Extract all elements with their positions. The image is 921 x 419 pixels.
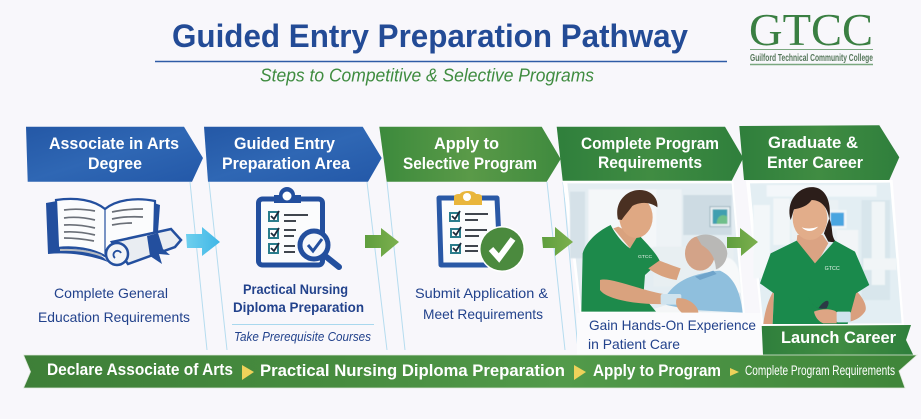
text: complete general education requirements: Education Requirements <box>38 309 190 325</box>
text: take prerequisite courses: Take Prerequisite Courses <box>234 329 371 344</box>
heading: apply to selective program: Apply to <box>434 135 499 153</box>
heading: associate in arts degree <box>26 127 203 182</box>
text: submit application and meet requirements <box>415 285 549 322</box>
heading: associate in arts degree: Degree <box>88 155 142 173</box>
text: practical nursing diploma preparation: Practical Nursing <box>243 282 348 297</box>
panel: apply to selective program <box>379 127 561 322</box>
heading: complete program requirements <box>557 127 743 181</box>
logo: GTCC: GTCC <box>749 5 873 55</box>
arrow: to apply <box>365 228 399 257</box>
ribbon: launch career <box>762 325 913 355</box>
icon: yellow triangle <box>242 365 254 380</box>
text: gain hands-on experience in patient care <box>577 313 763 355</box>
arrow: to guided entry <box>186 227 220 256</box>
arrow: to graduate <box>727 228 758 256</box>
arrow: to complete program <box>542 227 573 256</box>
icon: yellow triangle <box>574 365 586 380</box>
photo: nurse with patient: GTCC <box>638 254 653 260</box>
heading: associate in arts degree: Associate in Arts <box>49 135 179 153</box>
panel: guided entry preparation area <box>204 127 382 344</box>
title: Guided Entry Preparation Pathway <box>172 18 688 54</box>
panel: complete program requirements <box>557 127 763 355</box>
ribbon: pathway summary: Practical Nursing Diploma Preparation <box>260 362 565 380</box>
heading: graduate and enter career: Graduate & <box>768 134 858 152</box>
heading: graduate and enter career <box>739 125 899 180</box>
icon: open book and diploma <box>46 199 181 265</box>
heading: guided entry preparation area <box>204 127 382 182</box>
panel: associate in arts <box>26 127 203 325</box>
text: practical nursing diploma preparation <box>232 282 374 324</box>
patient <box>666 271 743 313</box>
icon: small yellow triangle <box>730 368 739 376</box>
panel dividers <box>190 182 578 350</box>
photo: graduate nurse: GTCC <box>825 266 840 272</box>
heading: complete program requirements: Complete Program <box>581 135 719 153</box>
photo: graduate nurse <box>746 180 904 326</box>
heading: guided entry preparation area: Guided Entry <box>234 135 336 153</box>
photo: nurse with patient <box>563 181 745 315</box>
icon: clipboard with magnifier <box>258 187 339 267</box>
heading: graduate and enter career: Enter Career <box>767 154 864 172</box>
nurse <box>581 225 660 312</box>
heading: complete program requirements: Requirements <box>598 154 702 172</box>
heading: apply to selective program: Selective Program <box>403 155 537 173</box>
text: submit application and meet requirements: Submit Application & <box>415 285 549 301</box>
subtitle: Steps to Competitive & Selective Programs <box>260 66 594 86</box>
panel: graduate and enter career <box>739 125 913 355</box>
heading: guided entry preparation area: Preparation Area <box>222 155 351 173</box>
ribbon: launch career: Launch Career <box>781 329 897 347</box>
text: gain hands-on experience in patient care: Gain Hands-On Experience <box>589 317 756 333</box>
text: complete general education requirements <box>38 285 190 325</box>
text: complete general education requirements: Complete General <box>54 285 168 301</box>
text: submit application and meet requirements: Meet Requirements <box>423 306 543 322</box>
text: gain hands-on experience in patient care: in Patient Care <box>588 336 680 352</box>
icon: clipboard with check <box>439 191 525 272</box>
ribbon: pathway summary: Declare Associate of Arts <box>47 361 233 379</box>
ribbon: pathway summary: Apply to Program <box>593 362 721 380</box>
text: practical nursing diploma preparation: Diploma Preparation <box>233 300 364 315</box>
ribbon: pathway summary <box>24 355 917 388</box>
heading: apply to selective program <box>379 127 561 182</box>
